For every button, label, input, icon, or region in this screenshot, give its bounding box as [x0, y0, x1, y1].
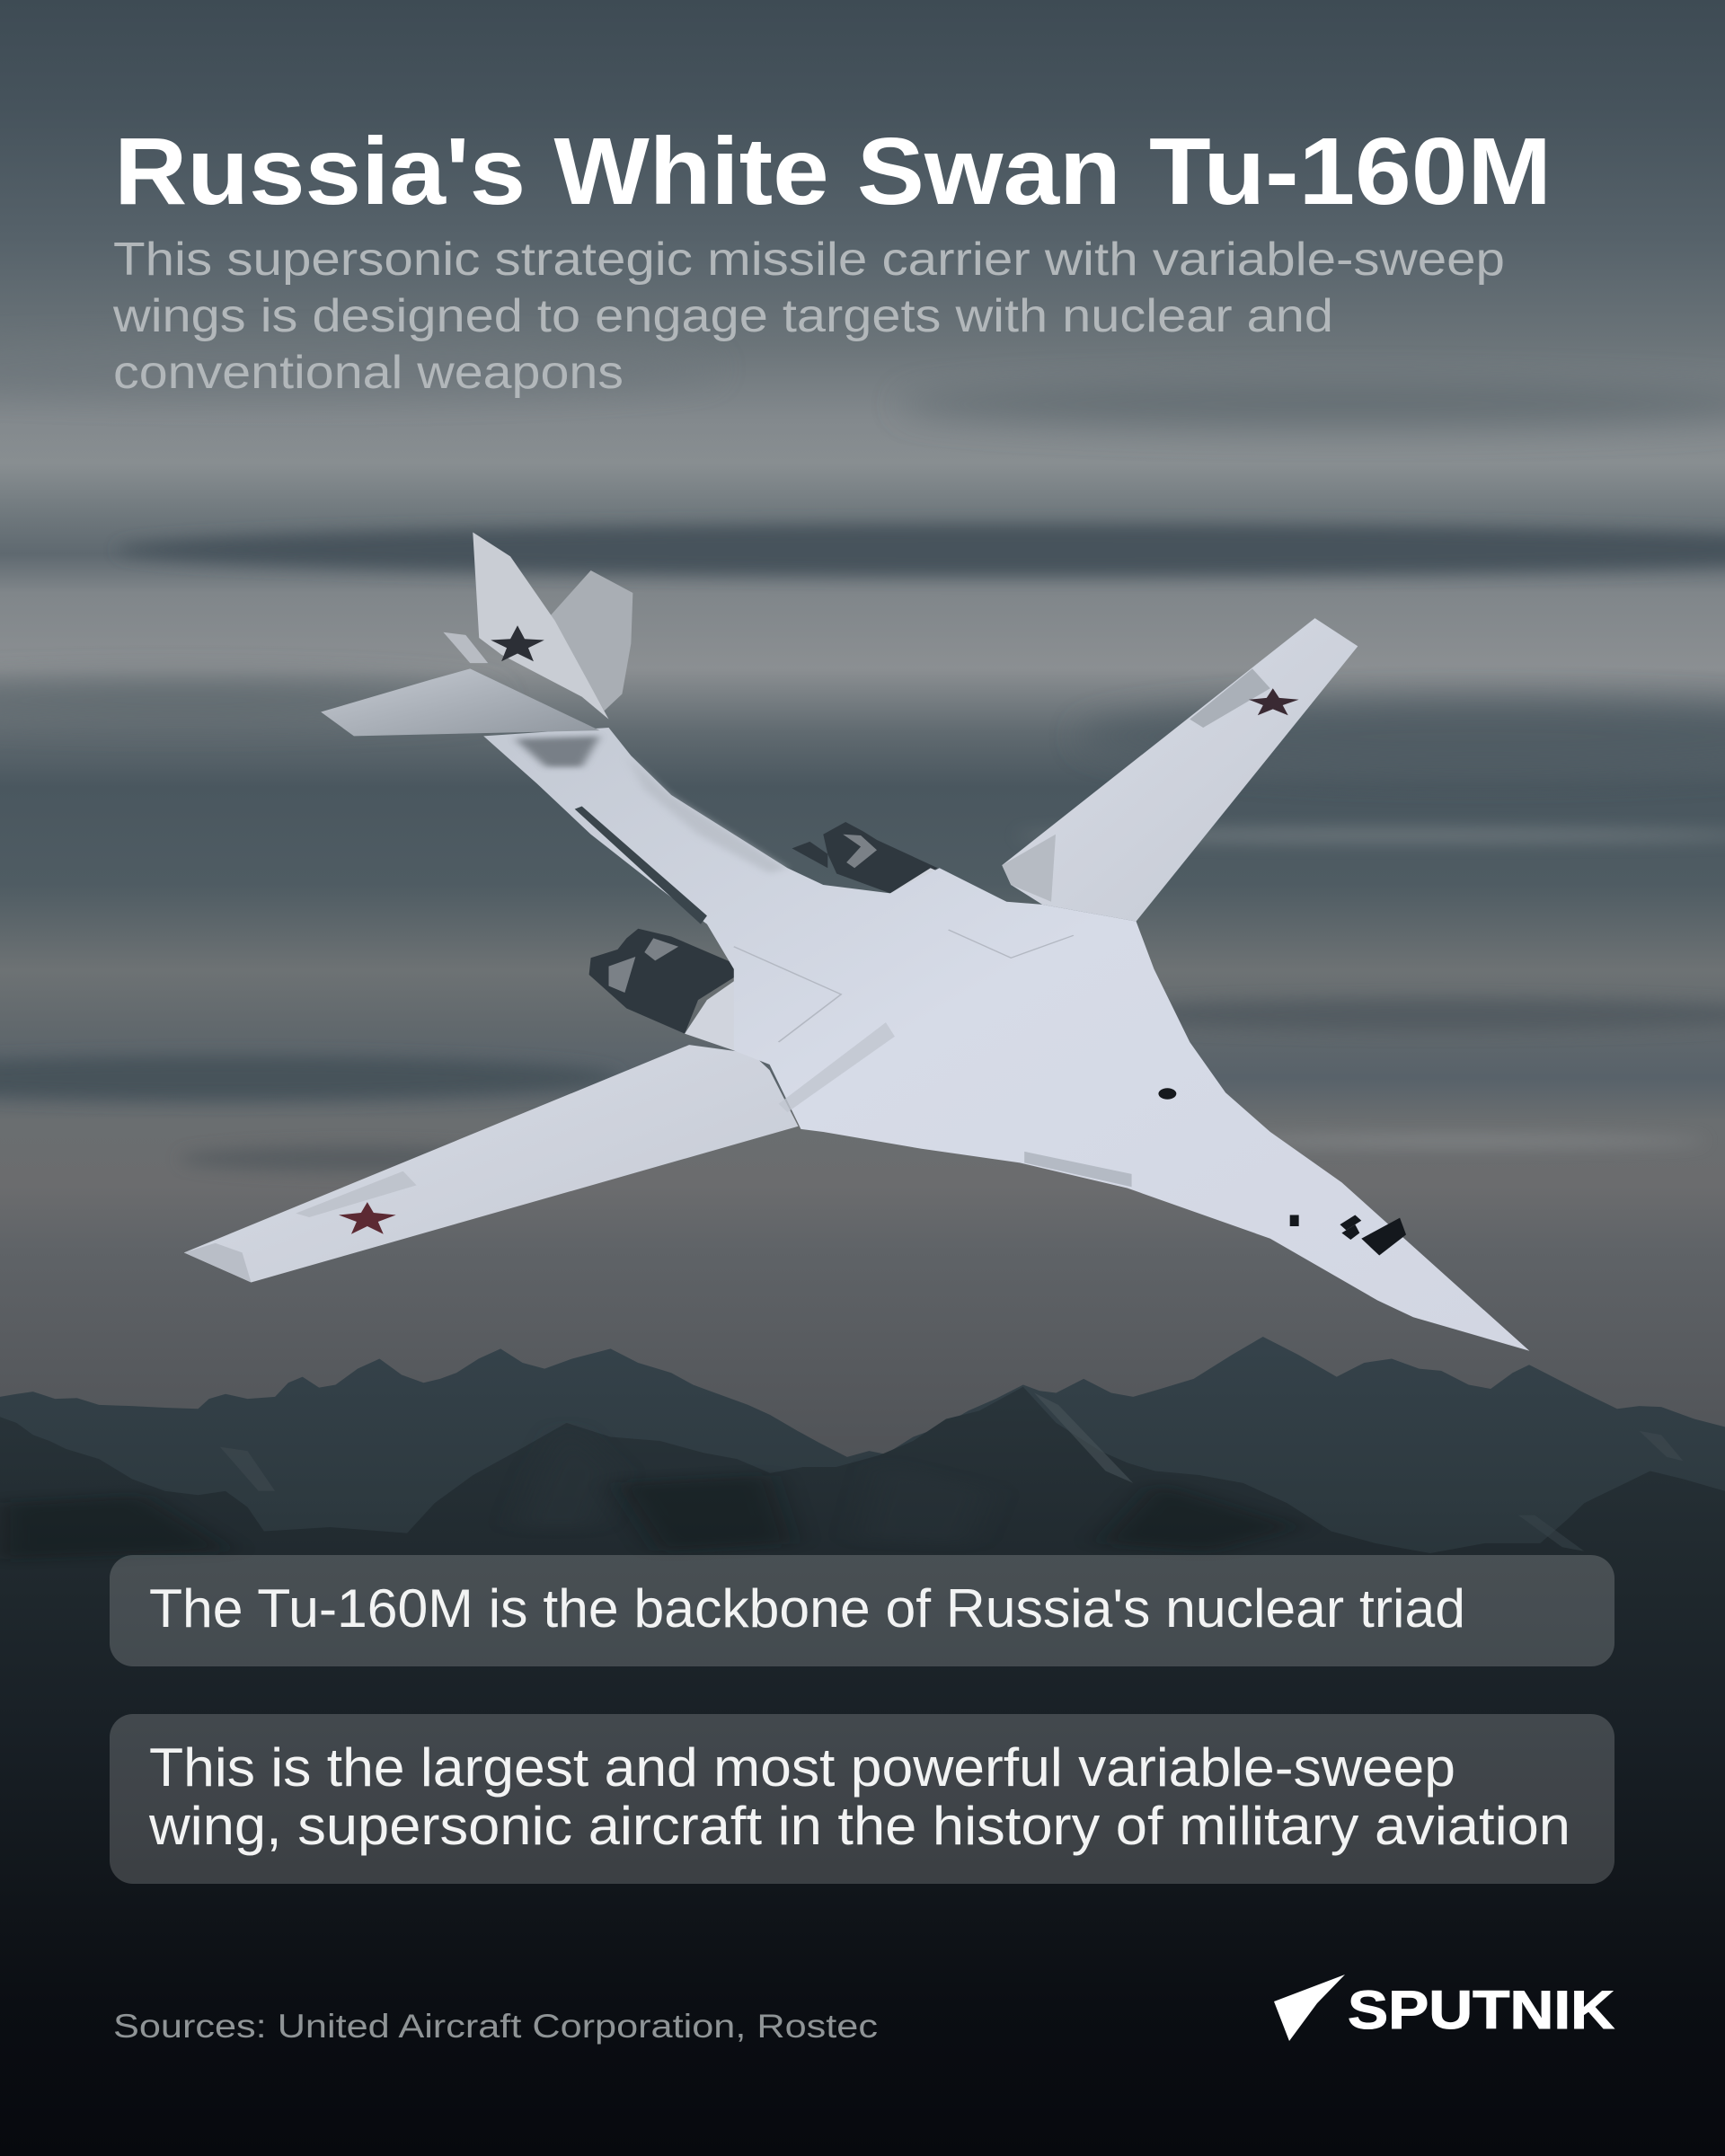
- logo: Sputnik: SPUTNIK: [1348, 1980, 1614, 2040]
- icon: star on right wing: [1249, 688, 1299, 715]
- background: mountain range: [0, 1337, 1725, 2156]
- fuselage and blended centre body: [483, 728, 1529, 1351]
- panel: largest variable-sweep aircraft fact: This is the largest and most powerful variable-sweep: [149, 1737, 1455, 1798]
- panel: nuclear triad fact: The Tu-160M is the backbone of Russia's nuclear triad: [149, 1578, 1465, 1639]
- panel: largest variable-sweep aircraft fact: wing, supersonic aircraft in the history of military aviation: [148, 1796, 1570, 1856]
- icon: underside hatch: [1158, 1088, 1176, 1100]
- vertical tail fin: [443, 532, 609, 720]
- subtitle text block: [112, 234, 1505, 399]
- panel: nuclear triad fact: [110, 1555, 1614, 1666]
- engine nacelles, right side: [792, 822, 1006, 932]
- horizontal stabiliser: [321, 668, 600, 736]
- left wing: [184, 1045, 798, 1283]
- icon: second tail fin: [551, 570, 632, 711]
- dark fuselage stripe: [575, 807, 707, 924]
- subtitle text block: wings is designed to engage targets with nuclear and: [112, 290, 1333, 342]
- icon: star on left wing: [339, 1202, 396, 1234]
- aircraft: Tu-160M bomber: [184, 532, 1529, 1351]
- icon: star on tail: [491, 625, 544, 661]
- logo: Sputnik: [1274, 1975, 1614, 2041]
- sources note: Sources: United Aircraft Corporation, Rostec: [113, 2008, 878, 2045]
- panel: largest variable-sweep aircraft fact: [110, 1714, 1614, 1884]
- subtitle text block: conventional weapons: [113, 347, 624, 399]
- icon: Sputnik arrowhead: [1274, 1975, 1345, 2041]
- cockpit windows: [1290, 1215, 1406, 1256]
- subtitle text block: This supersonic strategic missile carrier with variable-sweep: [113, 234, 1505, 286]
- title: Russia's White Swan Tu-160M: [114, 119, 1552, 225]
- right wing: [1002, 618, 1358, 922]
- engine nacelles, left side: [589, 929, 850, 1065]
